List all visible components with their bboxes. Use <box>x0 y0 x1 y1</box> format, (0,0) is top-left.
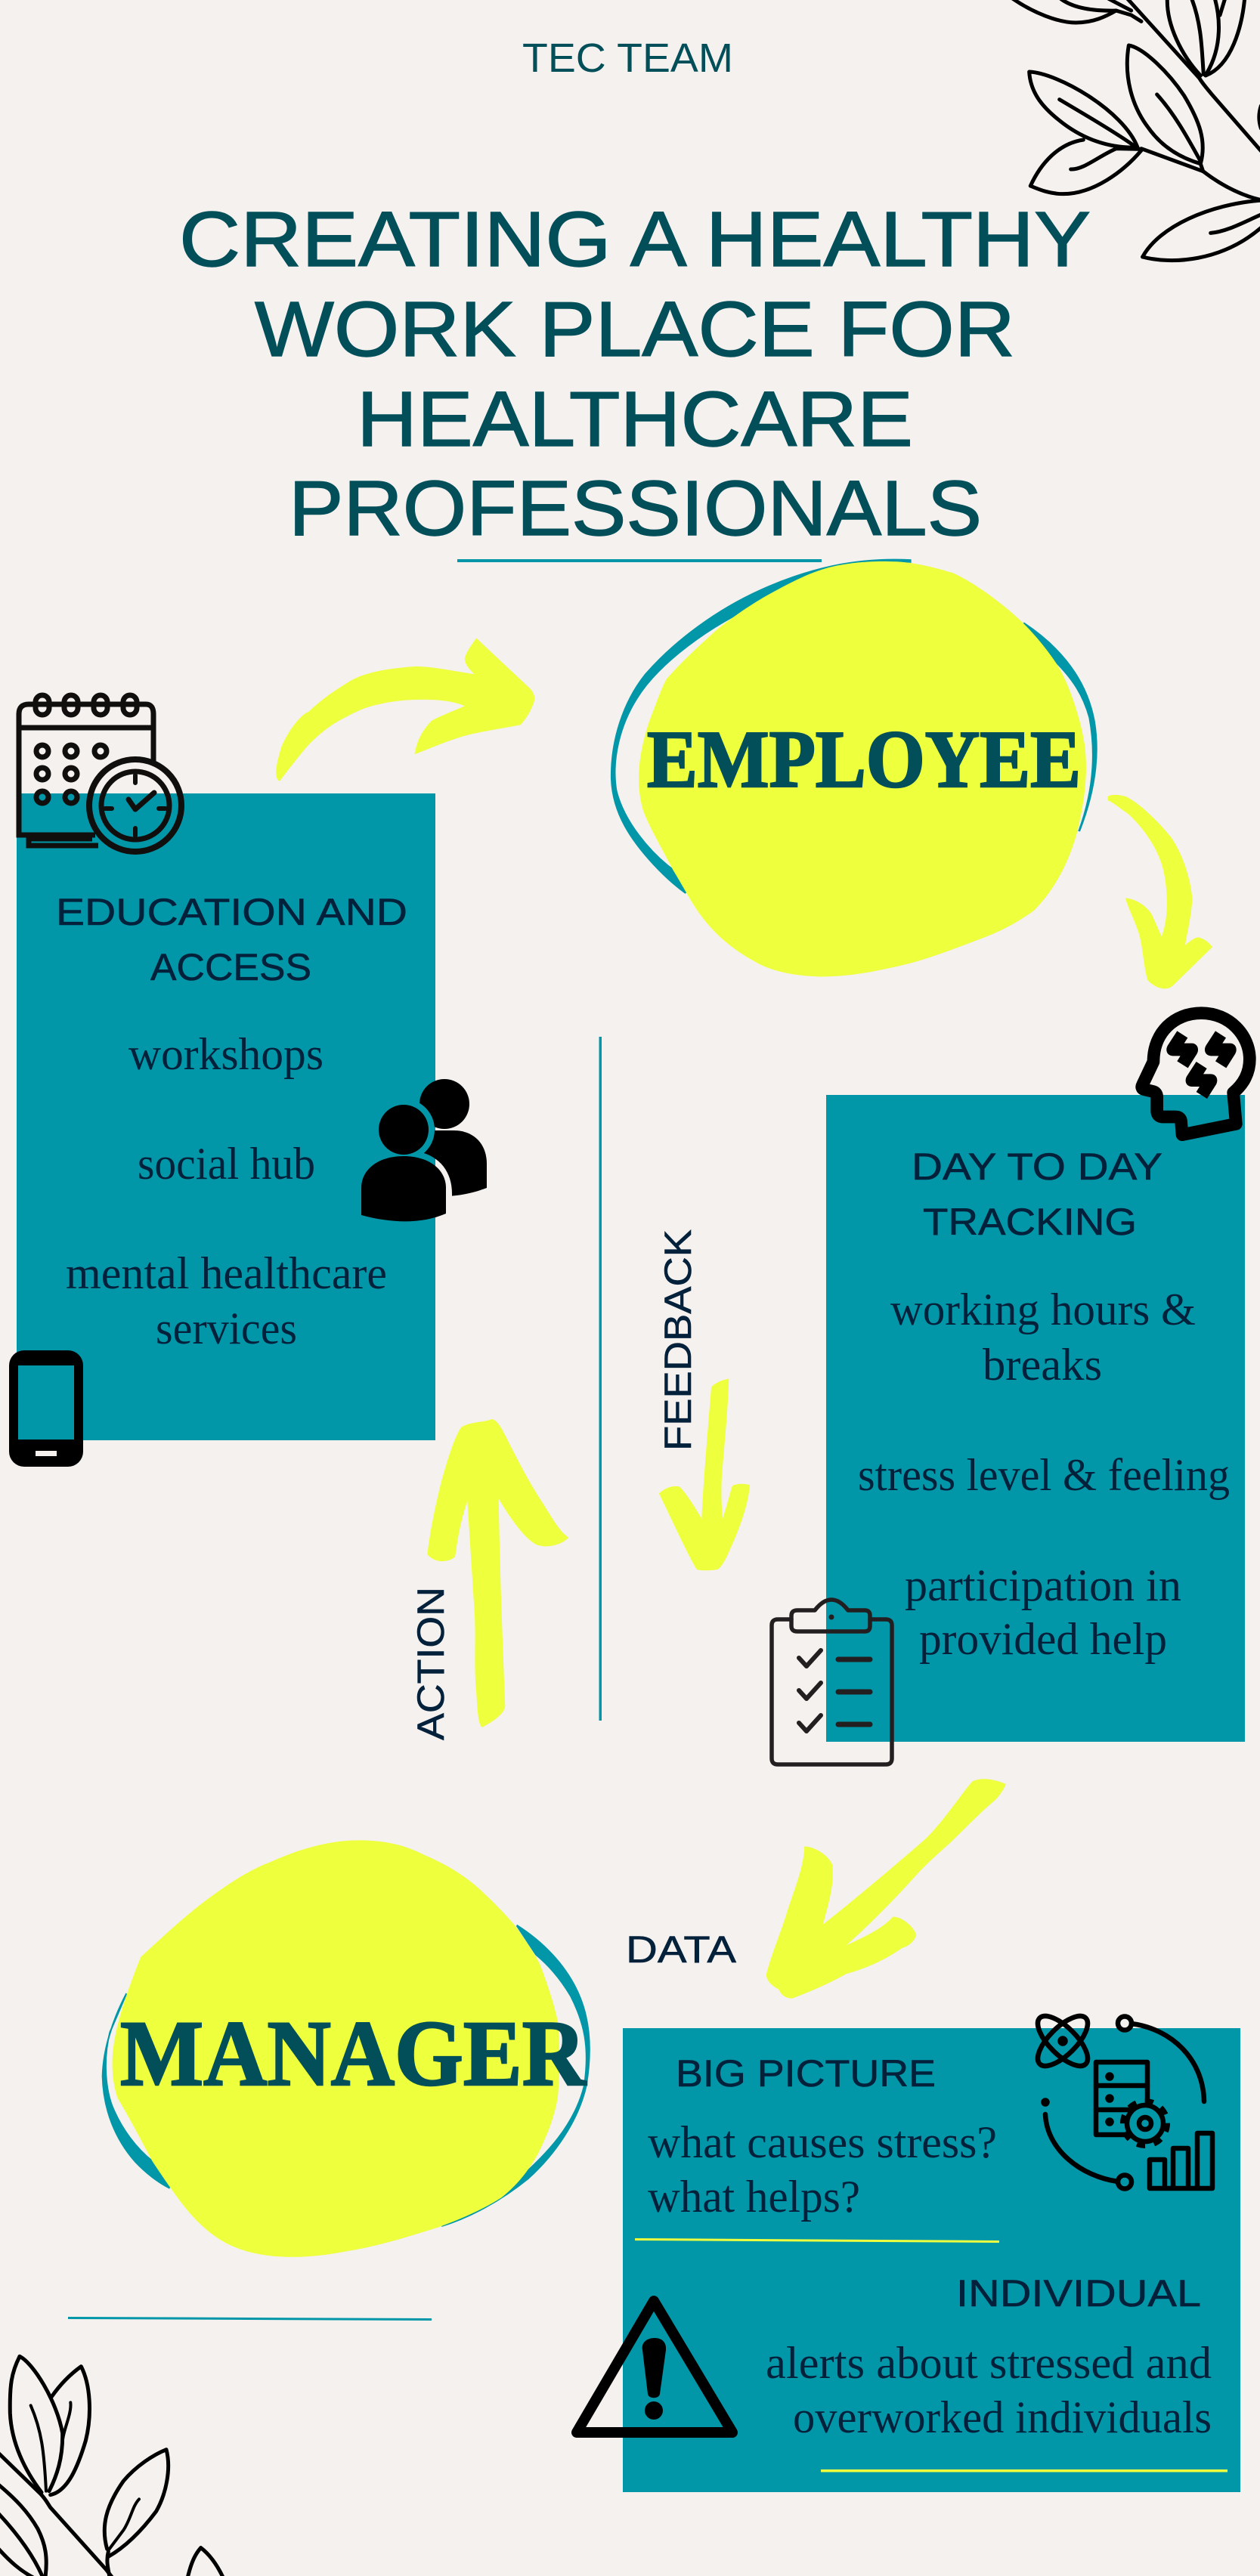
list: working hours and breaks: breaks <box>983 1340 1102 1390</box>
panel: day to day tracking <box>826 1095 1245 1742</box>
heading: big picture: BIG PICTURE <box>676 2052 936 2095</box>
list: social hub: social hub <box>138 1139 315 1189</box>
list: working hours and breaks: working hours & <box>890 1285 1196 1334</box>
list: mental healthcare services <box>66 1248 387 1353</box>
arrow: action <box>427 1419 569 1727</box>
text: what causes stress, what helps: what helps? <box>648 2172 860 2222</box>
icon: head with lightning bolts <box>1142 1013 1249 1135</box>
leaves: top right decoration <box>1013 0 1260 261</box>
manager underline <box>68 2317 432 2321</box>
label: feedback: FEEDBACK <box>657 1229 699 1451</box>
eyebrow: TEC TEAM: TEC TEAM <box>522 36 733 81</box>
heading: education and access: EDUCATION AND <box>56 891 407 933</box>
leaves: bottom left decoration <box>0 2356 223 2576</box>
heading: individual: INDIVIDUAL <box>956 2272 1201 2315</box>
text: alerts about stressed and overworked individuals: alerts about stressed and <box>766 2338 1212 2388</box>
vertical divider <box>599 1037 602 1721</box>
list: mental healthcare services: services <box>156 1303 297 1353</box>
title: WORK PLACE FOR <box>255 286 1015 373</box>
heading: education and access <box>56 891 407 988</box>
arrow: education to employee <box>276 638 534 781</box>
blob label: MANAGER: MANAGER <box>120 2002 587 2105</box>
panel: education and access <box>17 793 435 1440</box>
heading: day to day tracking: TRACKING <box>923 1201 1137 1243</box>
label: data: DATA <box>626 1928 737 1971</box>
text: what causes stress, what helps <box>648 2117 997 2222</box>
list: participation in provided help <box>905 1560 1181 1664</box>
title: HEALTHCARE <box>357 376 913 462</box>
icon: people <box>361 1079 487 1221</box>
panel: data big picture and individual <box>623 2028 1240 2492</box>
icon: clipboard checklist <box>772 1600 892 1764</box>
icon: phone <box>9 1350 83 1467</box>
blob: manager <box>103 1840 590 2257</box>
list: participation in provided help: participation in <box>905 1560 1181 1610</box>
title <box>179 196 1091 552</box>
blob: employee <box>611 560 1096 976</box>
icon: data analytics <box>1030 2009 1212 2188</box>
arrow: employee to tracking <box>1108 795 1212 988</box>
title underline <box>457 559 822 562</box>
title: CREATING A HEALTHY <box>179 196 1091 283</box>
heading: education and access: ACCESS <box>150 946 311 988</box>
list: working hours and breaks <box>890 1285 1196 1390</box>
label: action: ACTION <box>410 1587 452 1740</box>
list: mental healthcare services: mental healthcare <box>66 1248 387 1298</box>
title: PROFESSIONALS <box>289 465 982 552</box>
arrow: data <box>766 1779 1006 1999</box>
blob label: EMPLOYEE: EMPLOYEE <box>647 715 1081 805</box>
heading: day to day tracking <box>912 1146 1162 1243</box>
text: alerts about stressed and overworked individuals: overworked individuals <box>793 2392 1212 2442</box>
icon: calendar and clock <box>19 695 181 852</box>
list: participation in provided help: provided help <box>919 1614 1167 1664</box>
list: workshops: workshops <box>128 1029 324 1079</box>
text: what causes stress, what helps: what causes stress? <box>648 2117 997 2167</box>
heading: day to day tracking: DAY TO DAY <box>912 1146 1162 1188</box>
text: alerts about stressed and overworked individuals <box>766 2338 1212 2442</box>
list: stress level and feeling: stress level & feeling <box>858 1450 1230 1500</box>
arrow: feedback <box>659 1378 750 1570</box>
icon: warning triangle <box>577 2301 732 2432</box>
